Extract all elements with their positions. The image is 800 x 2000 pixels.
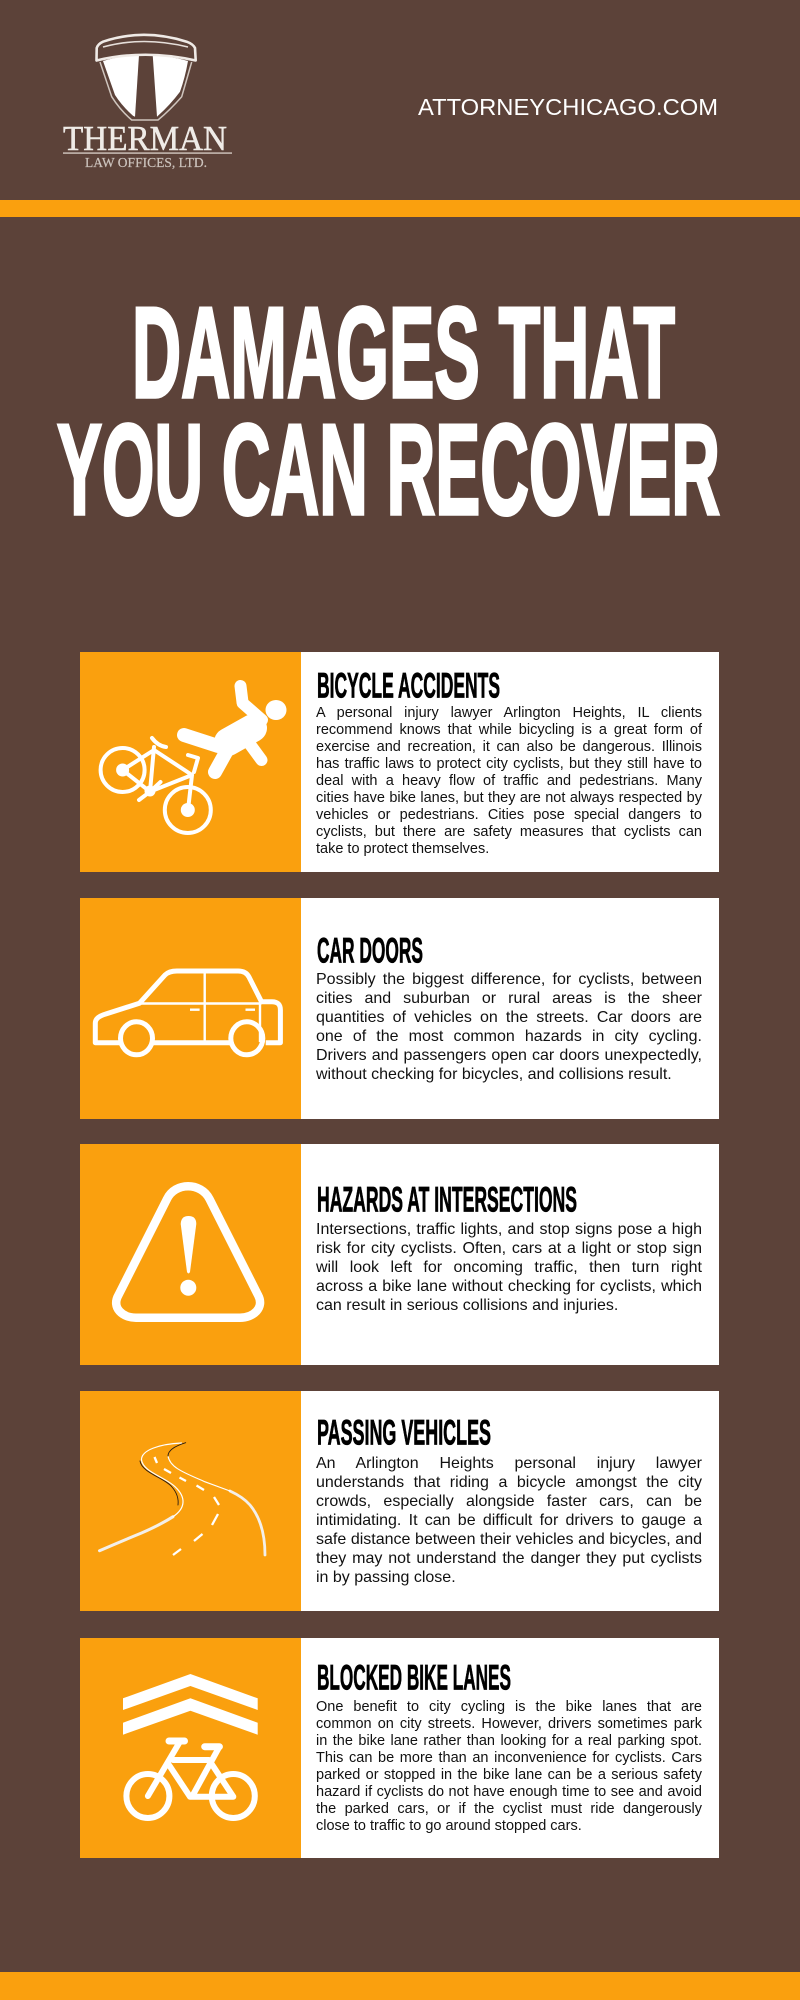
body text: deal with a heavy flow of traffic and pedestrians. Many [316, 773, 702, 789]
panel: bicycle accidents [80, 652, 719, 872]
body text: close to traffic to go around stopped cars. [316, 1818, 582, 1834]
body text: One benefit to city cycling is the bike lanes that are [316, 1699, 702, 1715]
body text: has traffic laws to protect city cyclists, but they still have to [316, 756, 702, 772]
heading: CAR DOORS [317, 931, 423, 970]
website URL: ATTORNEYCHICAGO.COM [418, 94, 718, 120]
body text [316, 1455, 702, 1586]
heading: BICYCLE ACCIDENTS [317, 667, 500, 706]
body text: Drivers and passengers open car doors unexpectedly, [316, 1046, 702, 1064]
body text: crowds, especially alongside faster cars, can be [316, 1493, 702, 1510]
body text: quantities of vehicles on the streets. Car doors are [316, 1008, 702, 1026]
body text [316, 1699, 702, 1834]
body text: in by passing close. [316, 1569, 456, 1586]
title [56, 296, 720, 528]
panel: car doors [80, 898, 719, 1119]
body text [316, 1221, 702, 1314]
body text: one of the most common hazards in city cycling. [316, 1028, 702, 1044]
body text: they may not understand the danger they put cyclists [316, 1550, 702, 1567]
body text: understands that riding a bicycle amongst the city [316, 1474, 702, 1491]
body text: across a bike lane without checking for cyclists, which [316, 1278, 702, 1295]
icon panel: car [80, 898, 301, 1119]
body text: take to protect themselves. [316, 841, 489, 857]
body text: Possibly the biggest difference, for cyclists, between [316, 970, 702, 988]
body text: can result in serious collisions and injuries. [316, 1297, 618, 1314]
body text: parked or stopped in the bike lane can be a serious safety [316, 1767, 702, 1783]
body text: This can be more than an inconvenience for cyclists. Cars [316, 1750, 702, 1766]
panel: blocked bike lanes [80, 1638, 719, 1858]
logo wordmark: THERMAN [63, 119, 227, 158]
heading: PASSING VEHICLES [317, 1414, 491, 1453]
body text: will look left for oncoming traffic, then turn right [316, 1259, 702, 1276]
body text: safe distance between their vehicles and bicycles, and [316, 1531, 702, 1548]
body text [316, 705, 702, 857]
body text: risk for city cyclists. Often, cars at a light or stop sign [316, 1240, 702, 1257]
body text [316, 970, 702, 1082]
icon panel: bike lane marking [80, 1638, 301, 1858]
icon panel: falling cyclist [80, 652, 301, 872]
body text: exercise and recreation, it can also be dangerous. Illinois [316, 739, 702, 755]
body text: cyclists, but there are safety measures that cyclists can [316, 824, 702, 840]
panel: passing vehicles [80, 1391, 719, 1611]
body text: cities have bike lanes, but they are not always respected by [316, 790, 702, 806]
body text: recommend knows that while bicycling is a great form of [316, 722, 702, 738]
logo tagline: LAW OFFICES, LTD. [85, 155, 207, 170]
bottom orange band [0, 1972, 800, 2000]
logo: Therman Law Offices [63, 34, 232, 170]
body text: in the bike lane rather than looking for a real parking spot. [316, 1733, 702, 1749]
top orange band [0, 200, 800, 217]
body text: intimidating. It can be difficult for drivers to gauge a [316, 1512, 702, 1529]
logo crest [96, 35, 196, 120]
icon panel: winding road [80, 1391, 301, 1611]
body text: the parked cars, or if the cyclist must ride dangerously [316, 1801, 702, 1817]
body text: vehicles or pedestrians. Cities pose special dangers to [316, 807, 702, 823]
body text: common on city streets. However, drivers sometimes park [316, 1716, 702, 1732]
body text: An Arlington Heights personal injury lawyer [316, 1455, 702, 1472]
body text: without checking for bicycles, and collisions result. [316, 1066, 672, 1082]
body text: Intersections, traffic lights, and stop signs pose a high [316, 1221, 702, 1238]
body text: A personal injury lawyer Arlington Heights, IL clients [316, 705, 702, 721]
icon panel: warning triangle [80, 1144, 301, 1365]
body text: hazard if cyclists do not have enough time to see and avoid [316, 1784, 702, 1800]
body text: cities and suburban or rural areas is the sheer [316, 990, 702, 1006]
heading: BLOCKED BIKE LANES [317, 1659, 511, 1698]
panel: hazards at intersections [80, 1144, 719, 1365]
